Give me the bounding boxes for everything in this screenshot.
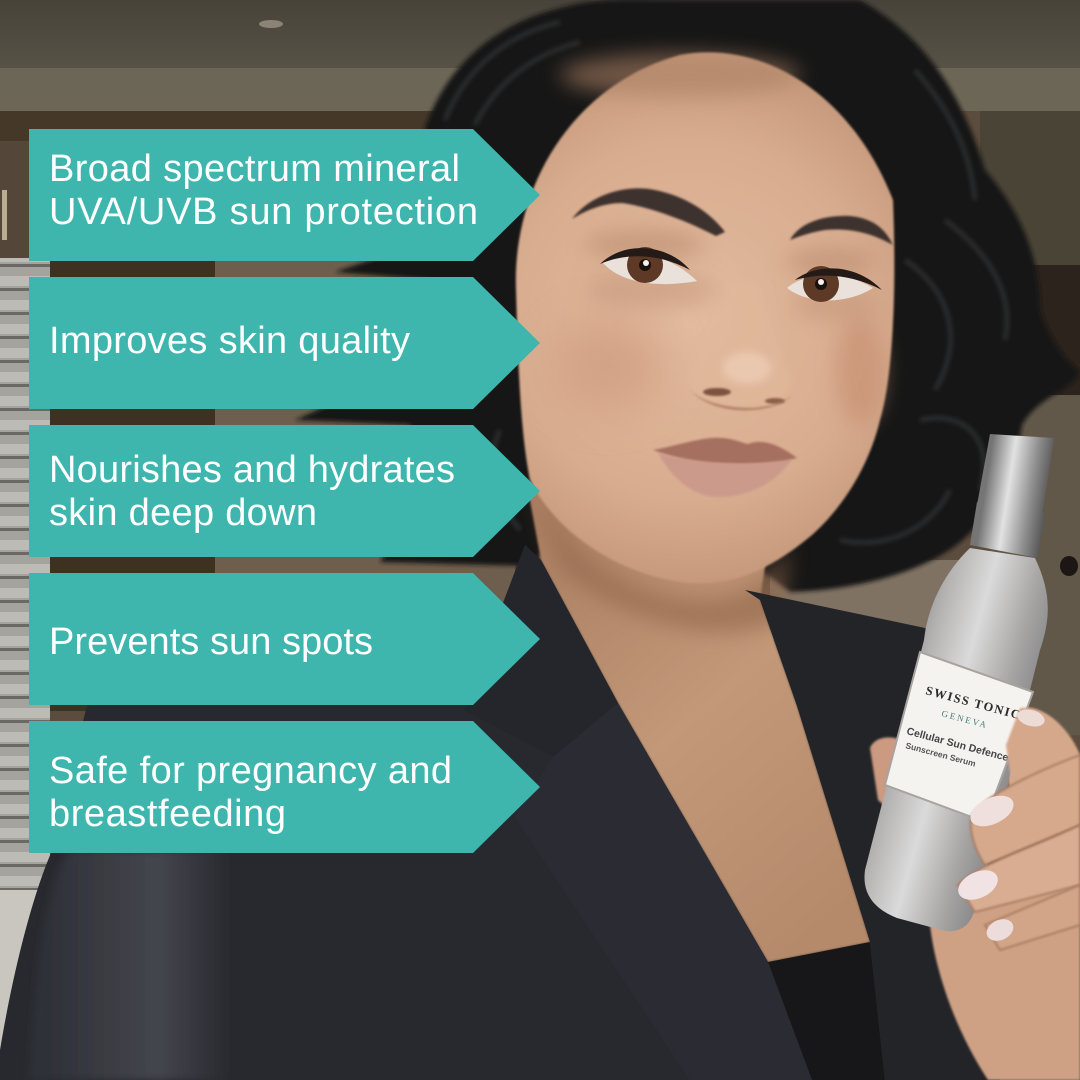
eyes [600, 247, 882, 302]
chin shadow [528, 470, 790, 632]
arrow 1: broad spectrum protection: Broad spectrum mineral [49, 148, 460, 190]
arrow 3: nourishes and hydrates [29, 425, 540, 557]
arrow 2: improves skin quality [29, 277, 540, 409]
hand [870, 708, 1080, 1080]
arrow 3: nourishes and hydrates: skin deep down [49, 492, 317, 534]
thumb and fingers over bottle [953, 707, 1080, 950]
bottle body [864, 548, 1048, 931]
face [516, 52, 894, 583]
arrow 1: broad spectrum protection [29, 129, 540, 261]
product label: GENEVA [940, 708, 989, 730]
arrow 5: safe for pregnancy: breastfeeding [49, 793, 286, 835]
ceiling light [259, 20, 283, 28]
arrow 2: improves skin quality: Improves skin quality [49, 320, 410, 362]
hair [295, 0, 1080, 592]
lips [653, 438, 797, 497]
arrow 1: broad spectrum protection: UVA/UVB sun protection [49, 191, 478, 233]
hair highlights [445, 22, 1007, 543]
product label [885, 652, 1033, 822]
spray cap [977, 434, 1054, 516]
arrow 3: nourishes and hydrates: Nourishes and hydrates [49, 449, 455, 491]
arrow 5: safe for pregnancy [29, 721, 540, 853]
blazer [0, 545, 1000, 1080]
cap collar [970, 502, 1045, 558]
bottle [864, 434, 1080, 950]
eyebrows [572, 188, 893, 245]
product label: Sunscreen Serum [904, 740, 977, 769]
nose [689, 280, 792, 411]
product label: Cellular Sun Defence [905, 725, 1010, 764]
arrow 4: prevents sun spots [29, 573, 540, 705]
arrow 4: prevents sun spots: Prevents sun spots [49, 621, 373, 663]
face shading [555, 53, 884, 425]
neck [528, 490, 870, 962]
arrow 5: safe for pregnancy: Safe for pregnancy and [49, 750, 452, 792]
product label: SWISS TONIC [924, 683, 1023, 722]
